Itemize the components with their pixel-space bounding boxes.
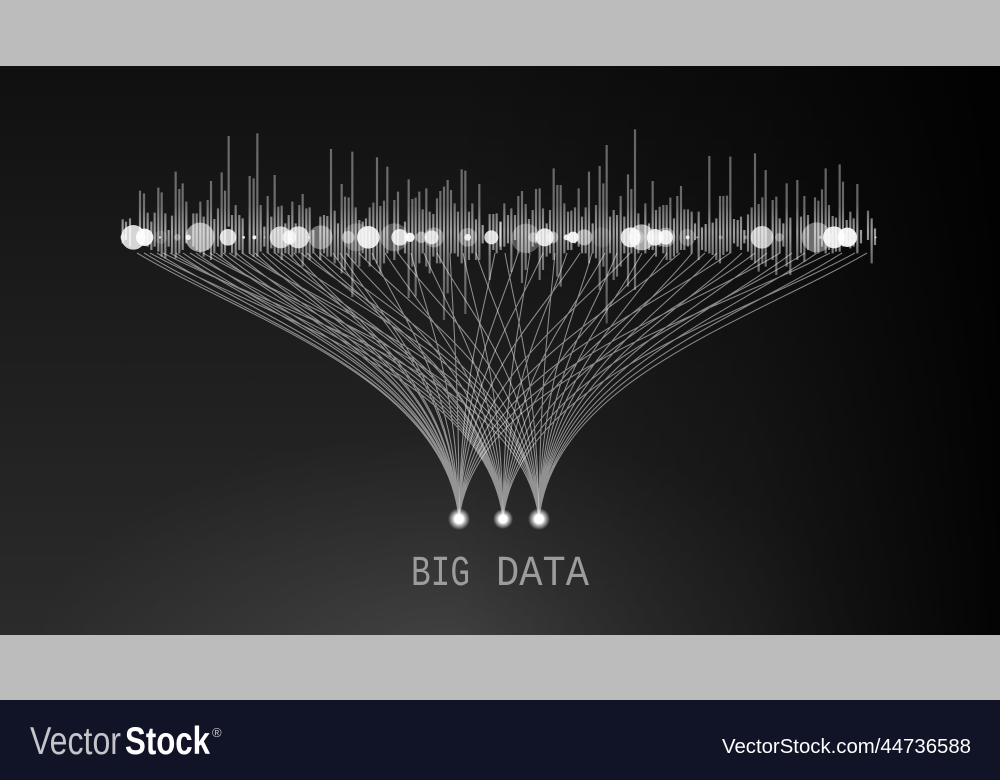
footer logo: VectorStock: Stock <box>125 720 210 763</box>
title: BIG DATA <box>411 549 589 598</box>
data bubbles, left half <box>120 223 498 252</box>
bottom grey band <box>0 635 1000 700</box>
fibre curves, right fan <box>459 253 867 519</box>
footer logo: VectorStock <box>30 720 222 763</box>
title: BIG DATA: BIG <box>411 549 470 598</box>
panel: dark gradient background <box>0 66 1000 635</box>
fibre curves, left fan <box>137 253 539 519</box>
waveform bars, right half <box>501 129 875 323</box>
footer logo: VectorStock: ® <box>212 725 222 740</box>
title: BIG DATA: DATA <box>496 549 589 598</box>
top grey band <box>0 0 1000 66</box>
waveform bars, left half <box>123 133 500 320</box>
footer image id: VectorStock.com/44736588 <box>722 736 971 758</box>
glowing source points <box>448 508 550 530</box>
footer logo: VectorStock: Vector <box>30 720 121 763</box>
footer bar <box>0 700 1000 780</box>
data bubbles, right half <box>511 222 877 253</box>
